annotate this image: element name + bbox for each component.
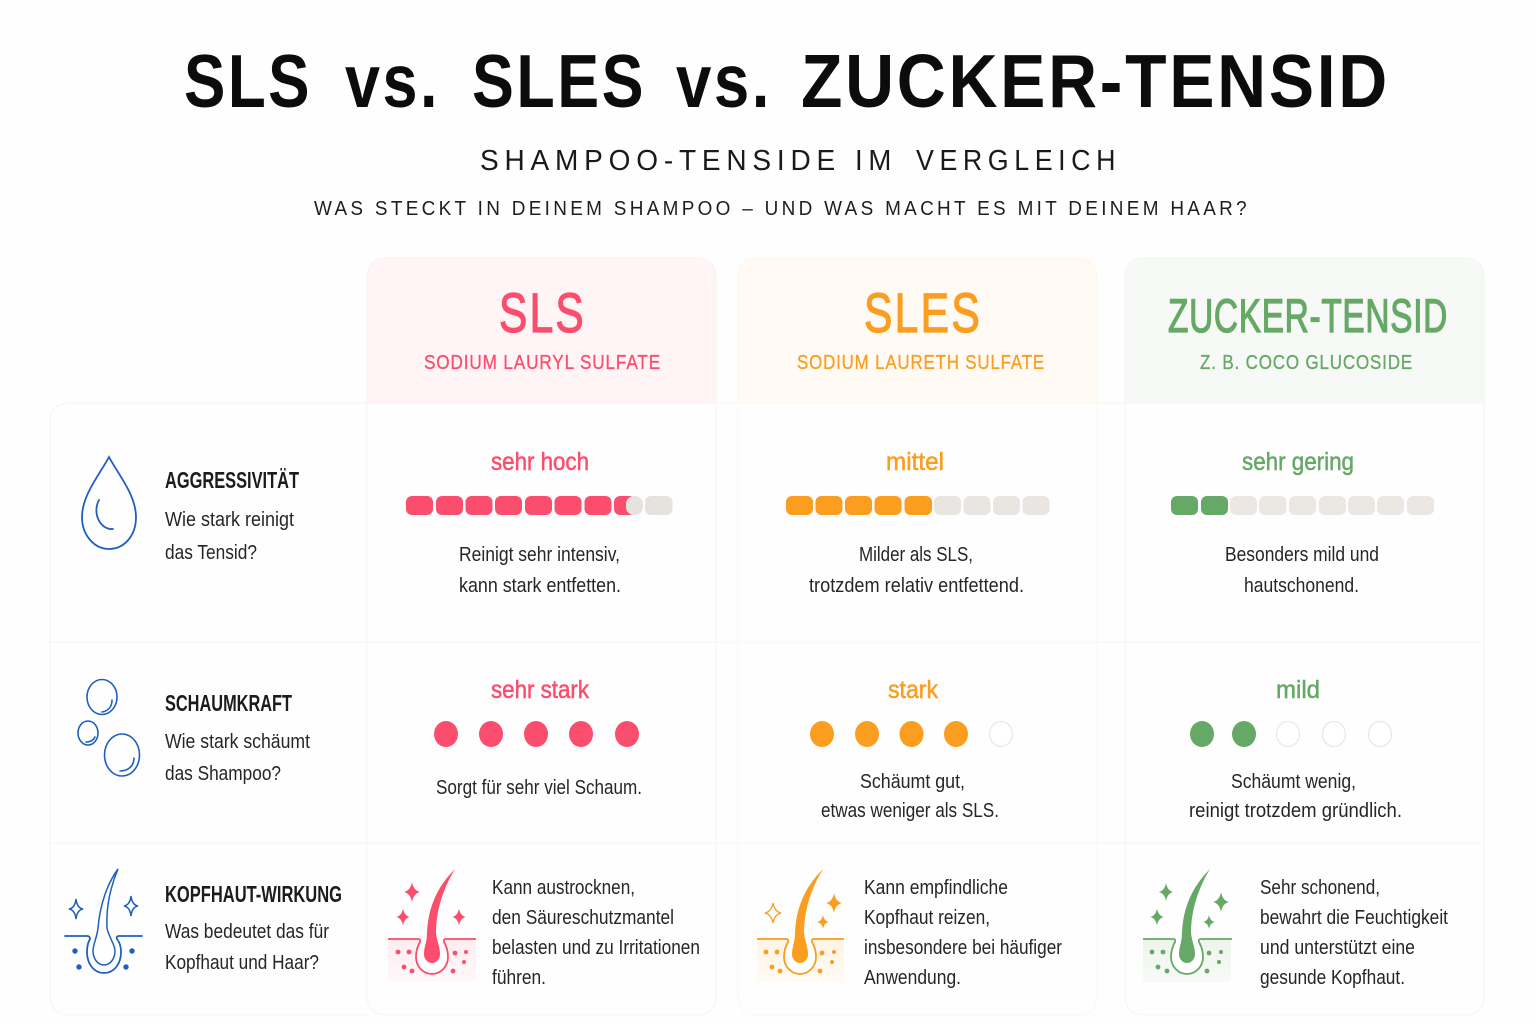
cell: SLES foam: stark: [888, 676, 938, 704]
cell text: SLS scalp: Kann austrocknen,: [492, 877, 635, 899]
cell: SLES aggressiveness: Milder als SLS,: [859, 544, 973, 566]
cell text: Zucker-Tensid scalp: bewahrt die Feuchtigkeit: [1260, 907, 1448, 929]
cell: SLS aggressiveness: [406, 448, 672, 597]
cell: SLS aggressiveness: kann stark entfetten.: [459, 575, 621, 597]
row label: Aggressivität: Wie stark reinigt: [165, 509, 294, 531]
cell: SLES foam: [810, 676, 1012, 822]
header: SLES: SLES: [864, 281, 982, 344]
level bar: 2 of 9: [1171, 496, 1434, 515]
title: vs.: [345, 39, 440, 123]
cell text: SLS scalp: den Säureschutzmantel: [492, 907, 674, 929]
icon: scalp green: [1143, 869, 1232, 982]
icon: water drop: [82, 457, 136, 549]
cell: SLS aggressiveness: Reinigt sehr intensiv,: [459, 544, 620, 566]
cell text: SLES scalp: Kopfhaut reizen,: [864, 907, 990, 929]
row label: Schaumkraft: [165, 690, 310, 785]
header: Zucker-Tensid: [1125, 258, 1484, 403]
row label: Kopfhaut-Wirkung: KOPFHAUT-WIRKUNG: [165, 881, 342, 907]
panel: SLS column: [367, 258, 716, 1015]
cell text: SLS scalp: [492, 877, 700, 989]
header: SLES: [738, 258, 1097, 403]
title: vs.: [676, 39, 772, 123]
header: SLS: SODIUM LAURYL SULFATE: [424, 352, 661, 374]
panel: SLES column: [716, 258, 1097, 1015]
panel: Zucker-Tensid column: [1097, 258, 1484, 1015]
cell: SLES aggressiveness: [786, 448, 1050, 597]
panel: row labels: [50, 403, 367, 1015]
cell: SLES foam: etwas weniger als SLS.: [821, 800, 999, 822]
cell: Zucker-Tensid aggressiveness: hautschonend.: [1244, 575, 1359, 597]
header: SLES: SODIUM LAURETH SULFATE: [797, 352, 1045, 374]
icon: scalp orange: [757, 869, 844, 982]
cell text: SLES scalp: Anwendung.: [864, 967, 961, 989]
row label: Schaumkraft: Wie stark schäumt: [165, 731, 310, 753]
cell: Zucker-Tensid foam: [1189, 676, 1402, 822]
cell: Zucker-Tensid foam: mild: [1276, 676, 1320, 704]
cell text: SLS scalp: führen.: [492, 967, 546, 989]
row label: Schaumkraft: das Shampoo?: [165, 763, 281, 785]
subtitle: VERGLEICH: [916, 145, 1121, 177]
header: SLS: SLS: [499, 281, 586, 344]
title: [184, 39, 1390, 123]
cell: Zucker-Tensid aggressiveness: [1171, 448, 1434, 597]
cell: Zucker-Tensid foam: reinigt trotzdem gründlich.: [1189, 800, 1402, 822]
subtitle: SHAMPOO-TENSIDE: [480, 145, 841, 177]
row label: Kopfhaut-Wirkung: Kopfhaut und Haar?: [165, 952, 319, 974]
cell text: Zucker-Tensid scalp: [1260, 877, 1448, 989]
cell text: SLES scalp: insbesondere bei häufiger: [864, 937, 1062, 959]
cell: Zucker-Tensid aggressiveness: Besonders mild und: [1225, 544, 1379, 566]
row label: Aggressivität: AGGRESSIVITÄT: [165, 467, 299, 493]
icon: scalp red: [388, 869, 476, 982]
row label: Schaumkraft: SCHAUMKRAFT: [165, 690, 292, 716]
icon: hair follicle outline: [65, 869, 142, 973]
cell: SLES aggressiveness: mittel: [886, 448, 944, 476]
cell text: Zucker-Tensid scalp: Sehr schonend,: [1260, 877, 1380, 899]
cell text: SLES scalp: Kann empfindliche: [864, 877, 1008, 899]
header: Zucker-Tensid: Z. B. COCO GLUCOSIDE: [1200, 352, 1413, 374]
row label: Kopfhaut-Wirkung: [165, 881, 342, 974]
title: ZUCKER-TENSID: [801, 39, 1390, 123]
cell: Zucker-Tensid foam: Schäumt wenig,: [1231, 771, 1356, 793]
cell: SLS foam: [434, 676, 642, 799]
header: SLS: [367, 258, 716, 403]
cell: SLES foam: Schäumt gut,: [860, 771, 965, 793]
cell text: SLES scalp: [864, 877, 1062, 989]
cell: SLS aggressiveness: sehr hoch: [491, 448, 589, 476]
tagline: WAS STECKT IN DEINEM SHAMPOO – UND WAS MACHT ES MIT DEINEM HAAR?: [314, 198, 1250, 220]
subtitle: IM: [855, 145, 897, 177]
cell: SLES aggressiveness: trotzdem relativ entfettend.: [809, 575, 1024, 597]
level dots: 4 of 5: [810, 721, 1012, 747]
row label: Aggressivität: das Tensid?: [165, 542, 257, 564]
cell: Zucker-Tensid aggressiveness: sehr gering: [1242, 448, 1354, 476]
level bar: 5 of 9: [786, 496, 1050, 515]
level dots: 2 of 5: [1190, 721, 1392, 747]
level bar: 8 of 10: [406, 496, 672, 515]
level dots: 5 of 5: [434, 721, 639, 747]
subtitle: [480, 145, 1121, 177]
cell: SLS foam: sehr stark: [491, 676, 589, 704]
row label: Kopfhaut-Wirkung: Was bedeutet das für: [165, 921, 329, 943]
cell text: Zucker-Tensid scalp: gesunde Kopfhaut.: [1260, 967, 1405, 989]
cell: SLS foam: Sorgt für sehr viel Schaum.: [436, 777, 642, 799]
icon: bubbles: [78, 680, 140, 776]
cell text: Zucker-Tensid scalp: und unterstützt eine: [1260, 937, 1415, 959]
cell text: SLS scalp: belasten und zu Irritationen: [492, 937, 700, 959]
title: SLS: [184, 39, 312, 123]
row label: Aggressivität: [165, 467, 299, 564]
title: SLES: [472, 39, 646, 123]
